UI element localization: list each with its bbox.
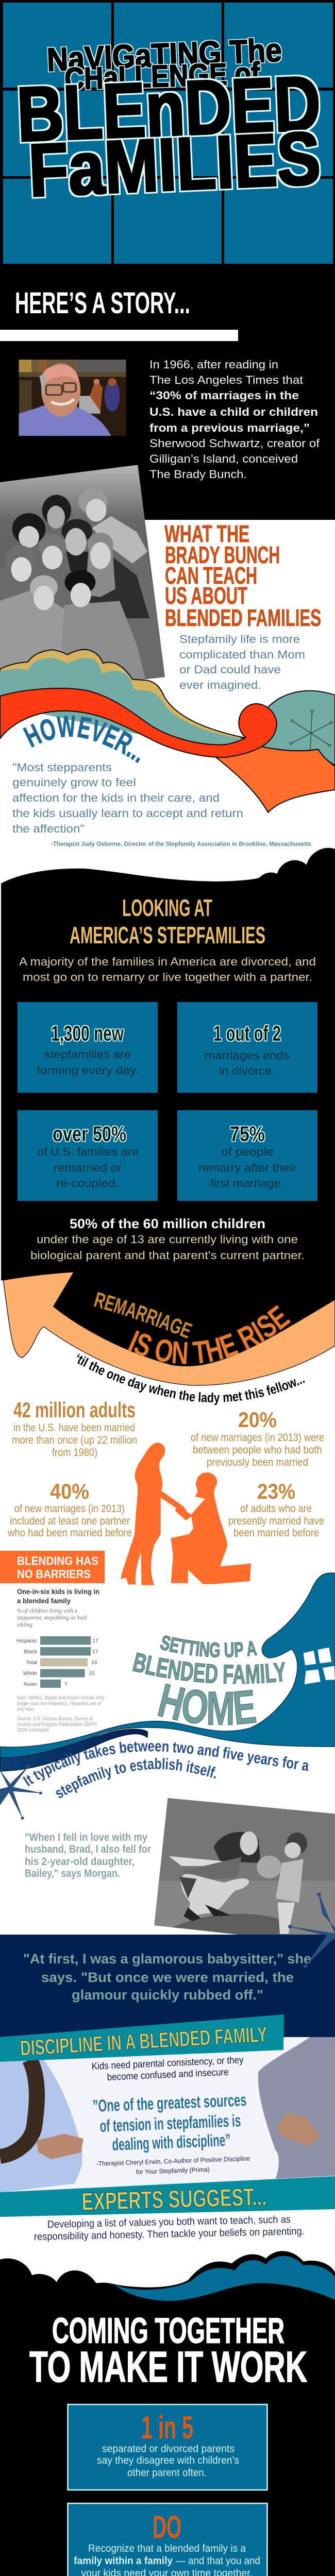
bar chart: White (23, 1670, 37, 1676)
stat: 40%: of new marriages (in 2013) (14, 1503, 125, 1515)
text: stepfamily life: complicated than Mom (179, 648, 305, 661)
photo: Sherwood Schwartz (19, 360, 126, 436)
arrow: rising peach ribbon (3, 1272, 335, 1385)
heading underline bar (0, 330, 238, 341)
text: list of values: Developing a list of values you both want to teach, such as (47, 2214, 291, 2230)
box: 1 in 5: 1 in 5 (141, 2410, 193, 2446)
bar chart: 15 (89, 1670, 95, 1676)
text: list of values: responsibility and honesty. Then tackle your beliefs on parenting. (34, 2226, 305, 2243)
box: 1 in 5 (68, 2404, 267, 2490)
callout: 50% of children (30, 1216, 305, 1262)
stat box: 1,300 new stepfamilies: 1,300 new (51, 1021, 124, 1045)
stat: 23% (228, 1479, 324, 1539)
chart notes: single-race non-Hispanics. Hispanics are of (17, 1701, 101, 1706)
heading (70, 894, 265, 948)
quote: stepparents: the affection" (12, 822, 85, 835)
panel: America's stepfamilies (1, 848, 335, 1385)
intro text (19, 955, 316, 984)
quote: greatest sources of tension (92, 2090, 247, 2154)
quote: greatest sources of tension: of tension in stepfamilies is (99, 2111, 241, 2136)
story text: “30% of marriages in the (149, 389, 299, 402)
bar chart: 17 (92, 1638, 98, 1644)
quote text (23, 1951, 311, 2003)
chart notes (17, 1695, 104, 1733)
stat: 23%: 23% (257, 1479, 295, 1503)
heading: HERE’S A STORY... (15, 286, 190, 320)
quote: stepparents: the kids usually learn to accept and return (12, 807, 243, 820)
black cloud background (1, 848, 335, 1385)
bar chart: Asian (24, 1681, 37, 1687)
story text: The Los Angeles Times that (149, 374, 303, 386)
stat box: 1 out of 2 (177, 1002, 317, 1093)
stat box: over 50%: over 50% (53, 1122, 126, 1146)
quote text: says. "But once we were married, the (41, 1970, 294, 1985)
stat: 42 million adults: more than once (up 22 million (12, 1434, 137, 1446)
box: do: Recognize that a blended family is a (88, 2543, 246, 2554)
story text: The Brady Bunch. (149, 468, 247, 481)
photo: The Brady Bunch cast (0, 465, 165, 680)
chart title: One-in-six kids is living in (17, 1588, 99, 1596)
stat box: 75%: of people (221, 1145, 274, 1158)
bar chart: Hispanic (16, 1638, 37, 1644)
quote: stepparents: affection for the kids in their care, and (12, 791, 220, 804)
panel: coming together to make it work (0, 2251, 335, 2576)
bar chart: 7 (64, 1681, 68, 1687)
panel: discipline in a blended family (0, 2014, 335, 2202)
quote: stepparents (12, 761, 311, 848)
quote: greatest sources of tension: dealing with discipline” (112, 2130, 231, 2154)
chart heading: BLENDING HAS (17, 1554, 98, 1567)
bar chart: Black (24, 1649, 38, 1655)
text: stepfamily life: ever imagined. (179, 679, 261, 691)
text: stepfamily life (179, 633, 305, 691)
quote text: "At first, I was a glamorous babysitter," she (23, 1951, 311, 1967)
chart notes: 2009 estimates (17, 1727, 49, 1733)
stat box: 1 out of 2: marriages ends (205, 1049, 290, 1062)
callout: 50% of children: under the age of 13 are currently living with one (37, 1233, 298, 1246)
stat: 20%: between people who had both (193, 1444, 322, 1456)
text: list of values (34, 2214, 305, 2243)
chart notes: any race. (17, 1706, 35, 1713)
box: do: family within a family (74, 2555, 173, 2567)
banner heading: experts suggest (0, 2176, 335, 2231)
story text: Gilligan’s Island, conceived (149, 452, 298, 465)
quote: when I fell in love: Bailey," says Morgan. (25, 1868, 120, 1879)
box: 1 in 5: say they disagree with children’s (97, 2455, 239, 2466)
stat box: 1 out of 2: 1 out of 2 (213, 1021, 281, 1045)
stat box: 1,300 new stepfamilies: stepfamilies are (44, 1048, 131, 1061)
icon: couple silhouette proposal (121, 1443, 251, 1585)
text: parental consistency: Kids need parental consistency, or they (91, 2055, 244, 2072)
decorative ribbon with star (0, 650, 335, 812)
chart title: stepparent, stepsibling or half- (17, 1615, 88, 1621)
black cloud background with blue swoosh (0, 2251, 335, 2576)
stat box: over 50%: of U.S. families are (37, 1145, 139, 1158)
heading: LOOKING AT (122, 894, 212, 921)
intro text: A majority of the families in America are divorced, and (19, 955, 316, 968)
story text: U.S. have a child or children (149, 405, 318, 418)
text: stepfamily life: or Dad could have (179, 663, 281, 676)
stat box: 75%: 75% (230, 1122, 265, 1146)
stat: 23%: of adults who are (240, 1503, 312, 1515)
box: 1 in 5: separated or divorced parents (102, 2443, 234, 2454)
stat: 40% (7, 1479, 132, 1539)
quote: greatest sources of tension: ”One of the greatest sources (92, 2090, 247, 2115)
chart title (17, 1588, 99, 1628)
box: do: DO (153, 2510, 181, 2545)
heading: however: HOWEVER... (23, 715, 140, 764)
quote attribution: -Therapist Judy Osborne, Director of the Stepfamily Association in Brookline, Massachusetts (51, 841, 311, 848)
title (15, 31, 322, 212)
heading: setting up a blended family home: HOME (158, 1684, 257, 1725)
chart notes: Income and Program Participation (SIPP) (17, 1722, 97, 1727)
stat: 20%: 20% (238, 1408, 277, 1432)
panel: header (0, 0, 335, 289)
icon: star on quote band (288, 1893, 335, 1968)
curved text: takes two to five years: It typically takes between two and five years for a (23, 1741, 308, 1787)
bar chart (16, 1636, 98, 1688)
icon: navy star (0, 1765, 42, 1820)
heading (29, 2310, 307, 2391)
chart heading: NO BARRIERS (17, 1567, 91, 1581)
intro text: most go on to remarry or live together with a partner. (23, 971, 312, 984)
stat box: over 50%: remarried or (54, 1161, 122, 1174)
heading: setting up a blended family home (132, 1635, 286, 1725)
stat: 42 million adults: from 1980) (52, 1447, 97, 1459)
stat: 23%: been married before (233, 1527, 319, 1539)
chart notes: Note: Whites, blacks and Asians include only (17, 1695, 104, 1701)
photo: mother and toddler (149, 1796, 335, 1936)
stat: 40%: who had been married before (7, 1527, 132, 1539)
icon: house with ribbon (0, 1573, 335, 1771)
stat box: over 50%: re-coupled. (56, 1177, 119, 1190)
quote: when I fell in love: husband, Brad, I also fell for (25, 1843, 151, 1855)
stat: 20% (191, 1408, 324, 1468)
stat: 42 million adults (12, 1398, 137, 1459)
text: parental consistency (91, 2055, 244, 2083)
heading: what the Brady Bunch can teach us: US ABOUT (165, 582, 247, 609)
text: parental consistency: become confused and insecure (107, 2067, 229, 2083)
quote: when I fell in love: "When I fell in love with my (25, 1832, 147, 1843)
story text: In 1966, after reading in (149, 358, 278, 371)
quote attribution: for Your Stepfamily (Prima) (136, 2166, 210, 2176)
box: do (68, 2503, 267, 2576)
quote: when I fell in love: his 2-year-old daughter, (25, 1856, 135, 1868)
story text (149, 358, 320, 481)
bar chart: 16 (91, 1659, 97, 1666)
quote attribution (96, 2155, 250, 2176)
callout: 50% of children: 50% of the 60 million children (70, 1216, 265, 1231)
panel: blending has no barriers chart (0, 1551, 105, 1733)
stat box: 75%: remarry after their (198, 1161, 296, 1174)
chart title: sibling (17, 1622, 32, 1628)
stat box: 75%: first marriage. (210, 1177, 284, 1190)
story text: Sherwood Schwartz, creator of (149, 437, 320, 450)
box: do: — and that you and (176, 2555, 260, 2567)
story text: from a previous marriage,” (149, 421, 310, 434)
quote: stepparents: "Most stepparents (12, 761, 112, 774)
title: NaVIGaTING The (46, 31, 282, 78)
stat: 40%: included at least one partner (10, 1515, 130, 1527)
heading: setting up a blended family home: BLENDED FAMILY (132, 1652, 286, 1684)
bar chart: Total (26, 1659, 37, 1666)
chart title: a blended family (17, 1597, 71, 1605)
stat box: 1,300 new stepfamilies: forming every day. (37, 1064, 139, 1077)
photo: parents with crossed arms (0, 2037, 335, 2193)
title: CHaLLENGE of (64, 56, 261, 96)
chart heading (0, 1551, 105, 1583)
heading: remarriage is on the rise: IS ON THE RISE (128, 1304, 291, 1364)
bar chart: 17 (92, 1649, 98, 1655)
stat: 40%: 40% (50, 1479, 89, 1503)
text: stepfamily life: Stepfamily life is more (179, 633, 300, 646)
curved text: takes two to five years: stepfamily to establish itself. (56, 1758, 216, 1798)
heading: what the Brady Bunch can teach us: CAN TEACH (165, 562, 257, 589)
heading: what the Brady Bunch can teach us (164, 520, 321, 631)
heading: setting up a blended family home: SETTING UP A (160, 1635, 258, 1658)
curved caption: 'til the one day: ‘til the one day when the lady met this fellow... (77, 1354, 305, 1405)
chart title: % of children living with a (17, 1608, 77, 1614)
quote: when I fell in love (25, 1832, 151, 1879)
heading: what the Brady Bunch can teach us: WHAT THE (164, 520, 249, 547)
quote attribution: -Therapist Cheryl Erwin, Co-Author of Positive Discipline (96, 2155, 250, 2167)
heading: remarriage is on the rise: REMARRIAGE (94, 1292, 193, 1338)
stat: 42 million adults: in the U.S. have been married (13, 1422, 135, 1434)
callout: 50% of children: biological parent and that parent's current partner. (30, 1249, 305, 1262)
quote text: glamour quickly rubbed off." (72, 1987, 263, 2003)
stat: 42 million adults: 42 million adults (13, 1398, 136, 1422)
panel: here's a story (0, 264, 335, 520)
chart notes: Source: U.S. Census Bureau, Survey of (17, 1716, 93, 1722)
stat: 20%: previously been married (207, 1456, 308, 1468)
panel: glamorous babysitter quote (0, 1935, 335, 2037)
stat box: 1,300 new stepfamilies (18, 1002, 158, 1093)
stat box: 75% (177, 1110, 317, 1201)
stat box: over 50% (18, 1110, 158, 1201)
quote: stepparents: genuinely grow to feel (12, 776, 136, 789)
stat box: 1 out of 2: in divorce. (219, 1064, 275, 1077)
box: 1 in 5: other parent often. (127, 2467, 207, 2479)
